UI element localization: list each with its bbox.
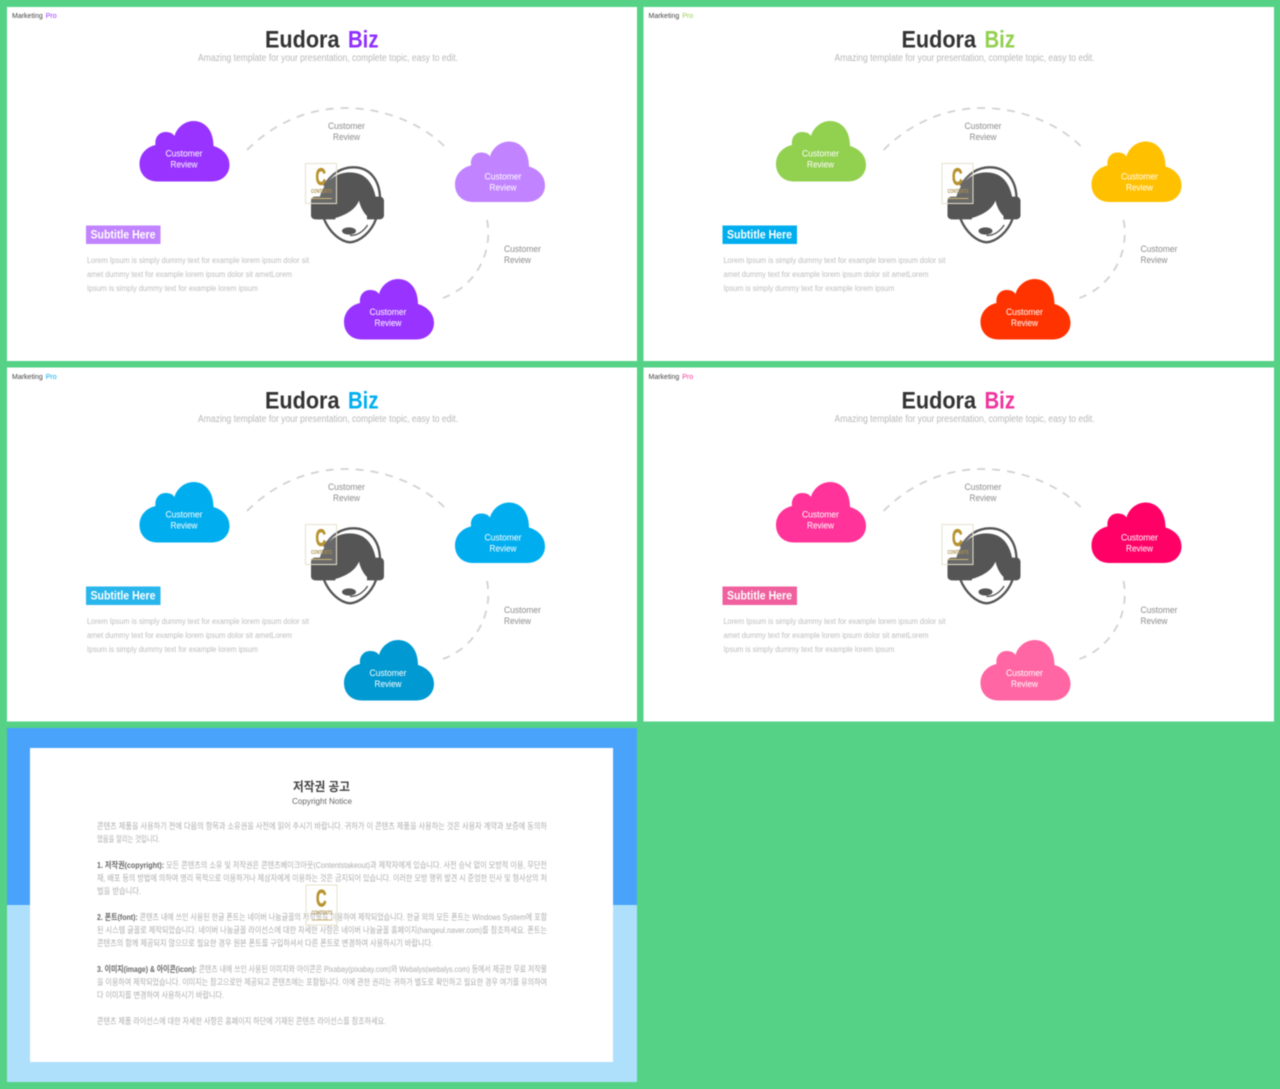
right arc label: Review xyxy=(504,255,531,266)
dashed arc: right xyxy=(1080,220,1125,298)
cloud: third: Customer xyxy=(1006,307,1043,318)
logo watermark xyxy=(306,524,336,564)
cloud: second xyxy=(455,502,545,563)
cloud: third xyxy=(980,640,1070,700)
right arc label xyxy=(504,244,541,266)
brand label: Marketing Pro xyxy=(648,13,693,20)
dashed arc: right xyxy=(443,581,488,659)
title: Eudora xyxy=(902,388,977,414)
subtitle tag xyxy=(722,586,797,605)
right arc label: Customer xyxy=(504,244,541,255)
title: Eudora xyxy=(902,26,977,54)
cloud: third xyxy=(980,279,1070,340)
notice section: copyright xyxy=(97,860,547,896)
title: Biz xyxy=(984,26,1015,54)
top arc label: Customer xyxy=(964,121,1002,132)
body text: Ipsum is simply dummy text for example lorem ipsum xyxy=(87,645,258,654)
notice intro xyxy=(97,821,547,844)
dashed arc: right xyxy=(443,220,488,298)
subtitle tag: Subtitle Here xyxy=(727,590,792,602)
body text: Ipsum is simply dummy text for example lorem ipsum xyxy=(724,284,895,293)
top arc label xyxy=(964,121,1002,143)
cloud: second: Review xyxy=(1126,182,1153,194)
right arc label: Customer xyxy=(1140,605,1178,616)
notice section: font: 콘텐츠의 함께 제공되지 않으므로 필요한 경우 원본 폰트를 구입하셔서 다른 폰트로 변경하여 사용하시기 바랍니다. xyxy=(97,938,433,948)
body text: Ipsum is simply dummy text for example lorem ipsum xyxy=(724,645,895,654)
top arc label: Customer xyxy=(964,482,1002,493)
title: Eudora xyxy=(265,388,340,414)
notice section: image and icon: 다 이미지를 변경하여 사용하시기 바랍니다. xyxy=(97,990,224,1000)
logo watermark xyxy=(942,524,973,564)
cloud: third: Review xyxy=(374,318,402,329)
body text: Ipsum is simply dummy text for example lorem ipsum xyxy=(87,284,258,293)
right arc label: Review xyxy=(1140,255,1168,266)
top arc label: Review xyxy=(333,493,360,504)
tagline: Amazing template for your presentation, complete topic, easy to edit. xyxy=(198,53,458,64)
body text: amet dummy text for example lorem ipsum dolor sit ametLorem xyxy=(724,270,929,279)
cloud: first: Customer xyxy=(166,148,202,160)
panel: blue slide xyxy=(7,368,637,722)
icon: headset agent xyxy=(311,528,384,603)
right arc label: Customer xyxy=(504,605,541,616)
cloud: third: Customer xyxy=(1006,668,1043,679)
body text: Lorem Ipsum is simply dummy text for example lorem ipsum dolor sit xyxy=(724,256,946,265)
cloud: first: Review xyxy=(170,160,198,170)
icon: headset agent xyxy=(311,167,384,242)
top arc label: Review xyxy=(970,132,997,143)
top arc label: Review xyxy=(970,493,997,504)
logo watermark xyxy=(306,164,336,204)
brand label: Marketing Pro xyxy=(12,13,57,20)
top arc label: Customer xyxy=(328,121,365,132)
icon: headset agent xyxy=(947,528,1020,603)
body text: amet dummy text for example lorem ipsum dolor sit ametLorem xyxy=(724,631,929,640)
notice section: image and icon: 을 이용하여 제작되었습니다. 이미지는 참고으로만 제공되고 콘텐츠에는 포함됩니다. 이에 관한 권리는 귀하가 별도로 확인하고 필요한 경우 여기를 유의하여 xyxy=(97,977,547,987)
cloud: second xyxy=(1092,502,1182,563)
panel: copyright notice xyxy=(7,728,637,1082)
notice footer line: 콘텐츠 제품 라이선스에 대한 자세한 사항은 홈페이지 하단에 기재된 콘텐츠 라이선스를 참조하세요. xyxy=(97,1016,386,1026)
body text: Lorem Ipsum is simply dummy text for example lorem ipsum dolor sit xyxy=(87,256,310,265)
cloud: third: Review xyxy=(1011,679,1038,690)
cloud: third: Customer xyxy=(370,307,406,318)
notice section: image and icon: 3. 이미지(image) & 아이콘(icon): 콘텐츠 내에 쓰인 사용된 이미지와 아이콘은 Pixabay(pixabay.com)와 Webalys(webalys.com) 등에서 제공한 무료 저작물 xyxy=(97,964,547,974)
cloud: first xyxy=(140,482,230,542)
cloud: second: Customer xyxy=(484,532,522,544)
notice section: font: 2. 폰트(font): 콘텐츠 내에 쓰인 사용된 한글 폰트는 네이버 나눔글꼴의 저작물을 이용하여 제작되었습니다. 한글 외의 모든 폰트는 Windows System에 포함 xyxy=(97,912,547,922)
body text: amet dummy text for example lorem ipsum dolor sit ametLorem xyxy=(87,270,292,279)
subtitle tag: Subtitle Here xyxy=(727,230,792,242)
dashed arc: top xyxy=(247,469,447,511)
top arc label xyxy=(328,482,365,504)
top arc label xyxy=(964,482,1002,504)
notice subheading: Copyright Notice xyxy=(292,796,352,806)
subtitle tag xyxy=(722,226,797,244)
body text: amet dummy text for example lorem ipsum dolor sit ametLorem xyxy=(87,631,292,640)
cloud: first: Customer xyxy=(166,510,202,520)
cloud: first xyxy=(776,121,866,182)
subtitle tag: Subtitle Here xyxy=(90,230,156,242)
cloud: third xyxy=(344,640,434,700)
cloud: first: Customer xyxy=(802,148,839,160)
notice section: copyright: 벌을 받습니다. xyxy=(97,886,141,896)
body text xyxy=(87,256,310,293)
dashed arc: top xyxy=(884,108,1084,150)
title: Biz xyxy=(984,388,1015,414)
title: Biz xyxy=(348,26,378,54)
dashed arc: top xyxy=(247,108,447,150)
icon: headset agent xyxy=(947,167,1020,242)
cloud: second xyxy=(1092,142,1182,202)
cloud: second xyxy=(455,142,545,202)
cloud: third: Review xyxy=(1011,318,1038,329)
top arc label xyxy=(328,121,365,143)
cloud: first: Review xyxy=(807,160,834,170)
cloud: first: Review xyxy=(807,520,834,532)
body text xyxy=(724,617,946,654)
right arc label xyxy=(1140,605,1178,627)
subtitle tag: Subtitle Here xyxy=(90,590,156,602)
title: Eudora xyxy=(265,26,340,54)
right arc label: Customer xyxy=(1140,244,1178,255)
cloud: third: Customer xyxy=(370,668,406,679)
tagline: Amazing template for your presentation, complete topic, easy to edit. xyxy=(834,53,1094,64)
subtitle tag xyxy=(86,226,160,244)
notice heading: 저작권 공고 xyxy=(293,779,350,794)
cloud: second: Review xyxy=(490,544,517,554)
right arc label: Review xyxy=(504,616,531,627)
cloud: second: Customer xyxy=(1121,532,1158,544)
title: Biz xyxy=(348,388,378,414)
brand label: Marketing Pro xyxy=(12,374,57,381)
notice intro: 였음을 알리는 것입니다. xyxy=(97,834,160,844)
cloud: first xyxy=(140,121,230,182)
tagline: Amazing template for your presentation, complete topic, easy to edit. xyxy=(834,414,1094,425)
panel: pink slide xyxy=(644,368,1274,722)
cloud: first: Customer xyxy=(802,510,839,520)
notice section: image and icon xyxy=(97,964,547,1000)
top arc label: Customer xyxy=(328,482,365,493)
tagline: Amazing template for your presentation, complete topic, easy to edit. xyxy=(198,414,458,425)
brand label: Marketing Pro xyxy=(648,374,693,381)
dashed arc: top xyxy=(884,469,1084,511)
cloud: third xyxy=(344,279,434,340)
notice section: font xyxy=(97,912,547,948)
notice section: copyright: 재, 배포 등의 방법에 의하여 영리 목적으로 이용하거나 제삼자에게 이용하는 것은 금지되어 있습니다. 이러한 모방 행위 발견 시 준엄한 민사 및 형사상의 처 xyxy=(97,873,547,883)
right arc label: Review xyxy=(1140,616,1168,627)
top arc label: Review xyxy=(333,132,360,143)
panel: purple slide xyxy=(7,7,637,361)
cloud: second: Review xyxy=(490,182,517,194)
notice intro: 콘텐츠 제품을 사용하기 전에 다음의 항목과 소유권을 사전에 읽어 주시기 바랍니다. 귀하가 이 콘텐츠 제품을 사용하는 것은 사용자 계약과 보증에 동의하 xyxy=(97,821,547,831)
body text xyxy=(724,256,946,293)
right arc label xyxy=(1140,244,1178,266)
cloud: second: Review xyxy=(1126,544,1153,554)
notice section: copyright: 1. 저작권(copyright): 모든 콘텐츠의 소유 및 저작권은 콘텐츠베이크아웃(Contentstakeout)과 제작자에게 있습니다. 사전 승낙 없이 모방적 이용, 무단전 xyxy=(97,860,547,870)
body text: Lorem Ipsum is simply dummy text for example lorem ipsum dolor sit xyxy=(87,617,310,626)
logo watermark xyxy=(942,164,973,204)
cloud: second: Customer xyxy=(484,172,522,182)
right arc label xyxy=(504,605,541,627)
logo watermark xyxy=(306,885,337,925)
dashed arc: right xyxy=(1080,581,1125,659)
body text: Lorem Ipsum is simply dummy text for example lorem ipsum dolor sit xyxy=(724,617,946,626)
body text xyxy=(87,617,310,654)
cloud: first: Review xyxy=(170,520,198,532)
cloud: second: Customer xyxy=(1121,172,1158,182)
notice section: font: 된 시스템 글꼴로 제작되었습니다. 네이버 나눔글꼴 라이선스에 대한 자세한 사항은 네이버 나눔글꼴 홈페이지(hangeul.naver.com)를 참조하세요. 폰트는 xyxy=(97,925,547,935)
subtitle tag xyxy=(86,586,160,605)
cloud: third: Review xyxy=(374,679,402,690)
cloud: first xyxy=(776,482,866,542)
panel: green slide xyxy=(644,7,1274,361)
